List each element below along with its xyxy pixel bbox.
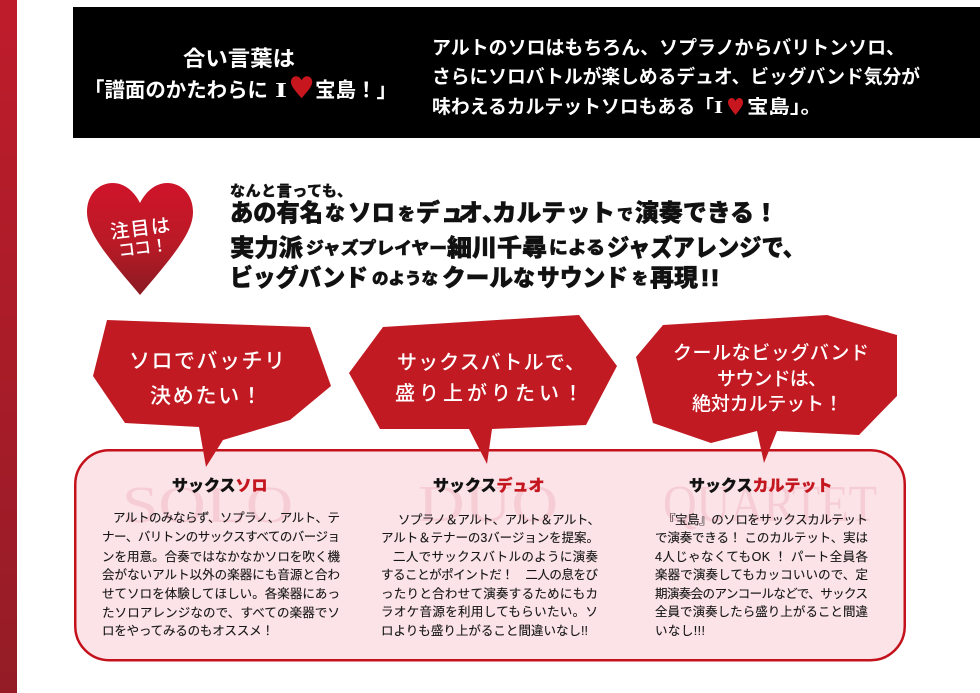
slogan: I: [275, 78, 287, 102]
column: solo: たソロアレンジなので、すべての楽器でソ: [102, 605, 340, 620]
column: duo: DUO: [418, 476, 558, 533]
header description: アルトのソロはもちろん、ソプラノからバリトンソロ、: [432, 37, 905, 59]
slogan: [84, 47, 397, 102]
header description: 宝島」。: [747, 96, 822, 118]
headline text: 演奏できる！: [635, 200, 778, 227]
column: duo: することがポイントだ！ 二人の息をび: [381, 567, 598, 582]
column: duo: ラオケ音源を利用してもらいたい。ソ: [381, 605, 598, 619]
headline text: のような: [372, 270, 438, 288]
callout: quartet: クールなビッグバンド: [673, 342, 869, 364]
column: quartet: 全員で演奏したら盛り上がること間違: [655, 604, 868, 619]
column: duo: サックスデュオ: [433, 476, 545, 495]
slogan: 「譜面のかたわらに: [84, 79, 268, 102]
icon: heart badge: [87, 183, 193, 295]
callout: duo: 盛り上がりたい！: [395, 382, 583, 405]
column: quartet: [655, 476, 877, 638]
callout: solo: [93, 320, 331, 467]
column: solo: 会がないアルト以外の楽器にも音源と合わ: [102, 567, 340, 582]
column: quartet: サックスカルテット: [689, 477, 833, 495]
column: solo: アルトのみならず、ソプラノ、アルト、テ: [113, 511, 340, 525]
column: quartet: 4人じゃなくてもOK ！ パート全員各: [655, 549, 868, 564]
header description: 味わえるカルテットソロもある「: [432, 96, 714, 118]
panel: three sax arrangements: [75, 450, 905, 660]
headline text: 実力派: [230, 235, 303, 262]
column: quartet: で演奏できる！ このカルテット、実は: [655, 530, 868, 545]
column: duo: [381, 476, 600, 638]
headline text: を: [398, 205, 415, 224]
column: quartet: 『宝島』のソロをサックスカルテット: [663, 512, 868, 527]
slogan: 合い言葉は: [183, 47, 295, 71]
headline text: ジャズアレンジで、: [607, 234, 805, 262]
column: quartet: 期演奏会のアンコールなどで、サックス: [655, 587, 868, 601]
headline text: デュオ、: [416, 199, 506, 227]
column: duo: ロよりも盛り上がること間違いなし!!: [381, 623, 588, 638]
callout: duo: [349, 315, 617, 464]
headline text: カルテット: [492, 200, 615, 227]
callout: quartet: サウンドは、: [717, 368, 827, 390]
callout: quartet: 絶対カルテット！: [692, 393, 843, 415]
column: solo: ロをやってみるのもオススメ！: [102, 624, 274, 638]
left red bar: [0, 0, 17, 693]
headline text: による: [549, 238, 605, 258]
headline text: 細川千尋: [447, 235, 547, 262]
column: solo: ンを用意。合奏ではなかなかソロを吹く機: [102, 550, 340, 564]
headline text: な: [513, 266, 535, 291]
callout: solo: ソロでバッチリ: [129, 350, 285, 373]
header description: さらにソロバトルが楽しめるデュオ、ビッグバンド気分が: [432, 65, 920, 88]
column: duo: アルト＆テナーの3バージョンを提案。: [381, 530, 599, 545]
headline text: !!: [700, 265, 720, 292]
headline text: ソロ: [348, 200, 395, 227]
slogan: 宝島！」: [315, 79, 397, 102]
header description: I: [714, 97, 723, 117]
headline text: なんと言っても、: [230, 183, 352, 200]
column: solo: ナー、バリトンのサックスすべてのバージョ: [102, 530, 340, 544]
headline text: な: [325, 202, 345, 225]
column: duo: ソプラノ＆アルト、アルト＆アルト、: [398, 513, 600, 527]
column: quartet: QUARTET: [663, 476, 877, 533]
column: solo: サックスソロ: [172, 477, 268, 495]
column: quartet: 楽器で演奏してもカッコいいので、定: [655, 567, 868, 582]
headline text: ジャズプレイヤー: [306, 238, 447, 258]
black header band: [73, 7, 980, 138]
headline text: ビッグバンド: [230, 264, 368, 292]
callout: quartet: [636, 315, 897, 463]
headline text: [230, 183, 805, 292]
column: duo: 二人でサックスバトルのように演奏: [393, 550, 598, 564]
headline text: 再現: [650, 265, 698, 292]
header description: [432, 37, 920, 118]
callout: duo: サックスバトルで、: [397, 351, 585, 374]
column: solo: [102, 477, 340, 638]
headline text: を: [632, 270, 648, 288]
icon: heart badge: 注目は: [109, 214, 171, 244]
column: duo: ったりと合わせて演奏するためにもカ: [381, 587, 598, 601]
column: solo: SOLO: [122, 477, 293, 534]
headline text: あの有名: [230, 200, 323, 227]
headline text: クール: [442, 265, 513, 292]
icon: heart badge: ココ！: [117, 236, 169, 261]
column: quartet: いなし!!!: [655, 624, 705, 638]
headline text: サウンド: [537, 265, 628, 292]
column: solo: せてソロを体験してほしい。各楽器にあっ: [102, 586, 340, 601]
headline text: で: [617, 207, 633, 224]
callout: solo: 決めたい！: [150, 385, 262, 408]
